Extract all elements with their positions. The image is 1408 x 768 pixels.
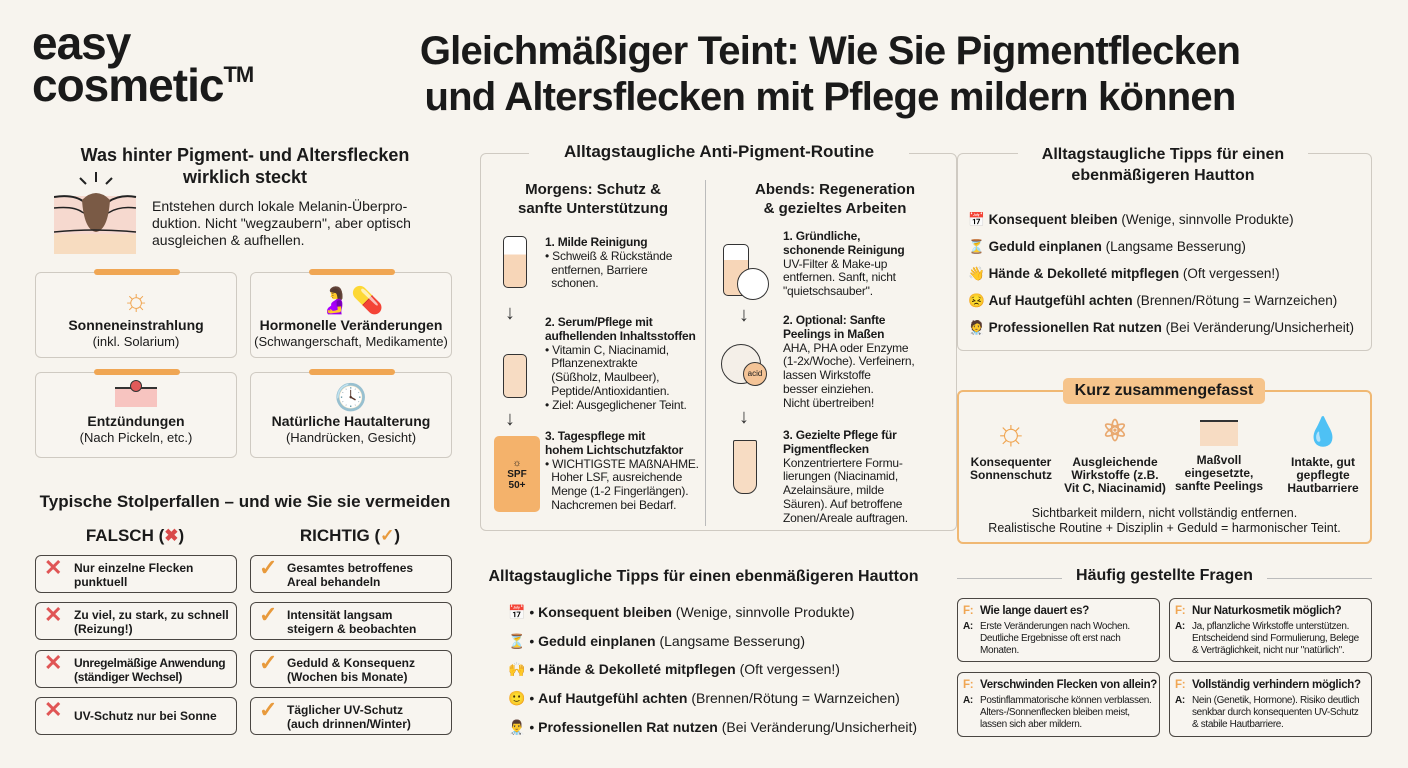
FAQ boxes xyxy=(957,598,1372,737)
summary items: gepflegte xyxy=(1296,468,1350,482)
panel: routine: (1-2x/Woche). Verfeinern, xyxy=(783,354,915,368)
panel: routine: acid xyxy=(748,369,762,378)
FAQ boxes: A: xyxy=(963,695,973,706)
summary items: ⚛ xyxy=(1102,415,1128,448)
card: Sonne: Sonneneinstrahlung xyxy=(68,317,204,333)
text: evening steps: "quietschsauber". xyxy=(783,284,873,298)
list: richtig: (Wochen bis Monate) xyxy=(287,670,407,684)
summary items: Ausgleichende xyxy=(1072,455,1158,469)
list: tips middle xyxy=(508,604,917,735)
list: tips right xyxy=(968,212,1354,335)
card: Hormone xyxy=(250,272,452,358)
icon: serum dropper xyxy=(503,354,527,398)
panel: routine: Azelainsäure, milde xyxy=(783,483,884,497)
text: morning steps: 1. Milde Reinigung xyxy=(545,235,647,249)
heading: morgens: sanfte Unterstützung xyxy=(518,200,668,217)
panel: routine: 2. Optional: Sanfte xyxy=(783,313,885,327)
panel: routine: hohem Lichtschutzfaktor xyxy=(545,443,683,457)
card: Entzündungen xyxy=(35,372,237,458)
list: falsch: (Reizung!) xyxy=(74,622,133,636)
text: intro: Entstehen durch lokale Melanin-Überpro- xyxy=(152,198,407,214)
summary items: Hautbarriere xyxy=(1287,481,1359,495)
panel: routine: besser einziehen. xyxy=(783,382,874,396)
heading: summary xyxy=(1063,378,1265,404)
FAQ boxes: F: xyxy=(963,605,973,617)
list: tips middle: 👨‍⚕️ • Professionellen Rat nutzen (Bei Veränderung/Unsicherheit) xyxy=(508,719,917,735)
card: Hautalterung: 🕓 xyxy=(335,382,367,412)
list: richtig: Areal behandeln xyxy=(287,575,380,589)
text: evening steps: UV-Filter & Make-up xyxy=(783,257,887,271)
FAQ boxes: F: xyxy=(963,679,973,691)
panel: routine: Zonen/Areale auftragen. xyxy=(783,511,908,525)
list: richtig: (auch drinnen/Winter) xyxy=(287,717,411,731)
text: morning steps: entfernen, Barriere xyxy=(551,263,648,277)
list: falsch: ✕ xyxy=(44,650,62,675)
summary items: Maßvoll xyxy=(1197,453,1241,467)
icon: spf tube: ☼ xyxy=(512,458,522,469)
list: tips right: 📅 Konsequent bleiben (Wenige, sinnvolle Produkte) xyxy=(968,212,1294,227)
summary text xyxy=(988,506,1341,535)
card: Hormone: Hormonelle Veränderungen xyxy=(260,317,442,333)
panel: routine: Peelings in Maßen xyxy=(783,327,884,341)
summary items: Vit C, Niacinamid) xyxy=(1064,481,1166,495)
icon: spf tube xyxy=(494,436,540,512)
panel: routine: 2. Serum/Pflege mit xyxy=(545,315,653,329)
icon: peeling pad xyxy=(721,344,761,384)
text: evening steps: schonende Reinigung xyxy=(783,243,905,257)
summary items: Wirkstoffe (z.B. xyxy=(1071,468,1159,482)
icon: spot tube xyxy=(733,440,757,494)
heading: abends xyxy=(755,181,915,217)
panel: routine: Pflanzenextrakte xyxy=(551,356,637,370)
list: falsch: ✕ xyxy=(44,602,62,627)
list: falsch: punktuell xyxy=(74,575,127,589)
FAQ boxes: Nein (Genetik, Hormone). Risiko deutlich senkbar durch konsequenten UV-Schutz & stabile Hautbarriere. xyxy=(1192,695,1359,730)
card: Sonne: (inkl. Solarium) xyxy=(93,334,179,349)
list: tips middle: 📅 • Konsequent bleiben (Wenige, sinnvolle Produkte) xyxy=(508,604,855,620)
card: Sonne xyxy=(35,272,237,358)
list: falsch: UV-Schutz nur bei Sonne xyxy=(74,709,217,723)
list: tips middle: ⏳ • Geduld einplanen (Langsame Besserung) xyxy=(508,633,805,649)
list: richtig: Täglicher UV-Schutz xyxy=(287,703,403,717)
FAQ boxes: A: xyxy=(1175,695,1185,706)
panel: routine: (Süßholz, Maulbeer), xyxy=(551,370,659,384)
logo xyxy=(32,17,253,111)
panel: routine xyxy=(480,153,957,531)
summary items: Konsequenter xyxy=(971,455,1051,469)
text: morning steps: • Schweiß & Rückstände xyxy=(545,249,672,263)
title: Gleichmäßiger Teint: Wie Sie Pigmentflecken xyxy=(420,29,1240,73)
heading: morgens xyxy=(518,181,668,217)
panel: routine: Pigmentflecken xyxy=(783,442,869,456)
panel: routine: lassen Wirkstoffe xyxy=(783,368,871,382)
logo: cosmeticTM xyxy=(32,59,253,111)
card: Entzündungen: Entzündungen xyxy=(87,413,185,429)
list: tips middle: 🙌 • Hände & Dekolleté mitpflegen (Oft vergessen!) xyxy=(508,661,840,677)
logo: easy xyxy=(32,17,130,69)
heading: routine: Alltagstaugliche Anti-Pigment-Routine xyxy=(564,142,874,161)
text: evening steps xyxy=(783,229,905,298)
summary items: Sonnenschutz xyxy=(970,468,1052,482)
summary items: eingesetzte, xyxy=(1185,466,1253,480)
list: richtig xyxy=(250,555,452,735)
FAQ boxes: Vollständig verhindern möglich? xyxy=(1192,679,1361,691)
icon: skin layers xyxy=(54,172,136,254)
list: tips right: 👋 Hände & Dekolleté mitpflegen (Oft vergessen!) xyxy=(968,266,1280,281)
FAQ boxes: Verschwinden Flecken von allein? xyxy=(980,679,1157,691)
FAQ boxes: A: xyxy=(1175,621,1185,632)
text: morning steps: schonen. xyxy=(551,276,598,290)
label: falsch: FALSCH (✖) xyxy=(86,526,184,545)
list: falsch xyxy=(35,555,237,735)
panel: routine: 3. Tagespflege mit xyxy=(545,429,645,443)
heading: Stolperfallen: Typische Stolperfallen – und wie Sie sie vermeiden xyxy=(40,492,450,511)
panel: routine: ↓ xyxy=(505,408,515,430)
list: tips right: 🧑‍⚕️ Professionellen Rat nutzen (Bei Veränderung/Unsicherheit) xyxy=(968,320,1354,335)
panel: tips right xyxy=(957,153,1372,351)
label: richtig: RICHTIG (✓) xyxy=(300,526,400,545)
text: evening steps: 1. Gründliche, xyxy=(783,229,860,243)
title: und Altersflecken mit Pflege mildern können xyxy=(425,75,1235,119)
text: morning steps xyxy=(545,235,672,290)
panel: routine: AHA, PHA oder Enzyme xyxy=(783,341,908,355)
card: Hautalterung: Natürliche Hautalterung xyxy=(272,413,430,429)
panel: routine: Peptide/Antioxidantien. xyxy=(551,384,669,398)
panel: routine: lierungen (Niacinamid, xyxy=(783,469,898,483)
list: richtig: steigern & beobachten xyxy=(287,622,416,636)
list: falsch: ✕ xyxy=(44,555,62,580)
panel: summary xyxy=(957,390,1372,544)
summary text: Realistische Routine + Disziplin + Geduld = harmonischer Teint. xyxy=(988,521,1341,535)
summary items: sanfte Peelings xyxy=(1175,479,1263,493)
icon: cleanser evening xyxy=(723,244,749,296)
heading: tips middle: Alltagstaugliche Tipps für einen ebenmäßigeren Hautton xyxy=(488,568,918,585)
heading: morgens: Morgens: Schutz & xyxy=(525,181,661,198)
card: Hautalterung xyxy=(250,372,452,458)
list: tips right: ⏳ Geduld einplanen (Langsame Besserung) xyxy=(968,239,1246,254)
heading: causes: wirklich steckt xyxy=(183,167,307,187)
list: richtig: ✓ xyxy=(259,697,277,722)
FAQ boxes: Postinflammatorische können verblassen. Alters-/Sonnenflecken bleiben meist, lassen sich aber mildern. xyxy=(980,695,1151,730)
heading: abends: & gezieltes Arbeiten xyxy=(764,200,906,217)
summary items: Intakte, gut xyxy=(1291,455,1355,469)
card: Hautalterung: (Handrücken, Gesicht) xyxy=(286,430,416,445)
heading: tips right: Alltagstaugliche Tipps für einen xyxy=(1042,146,1284,163)
panel: routine: Konzentriertere Formu- xyxy=(783,456,903,470)
panel: routine: • Vitamin C, Niacinamid, xyxy=(545,343,669,357)
list: richtig: ✓ xyxy=(259,602,277,627)
panel: routine: Menge (1-2 Fingerlängen). xyxy=(551,484,688,498)
icon: pump bottle xyxy=(503,236,527,288)
FAQ boxes: Nur Naturkosmetik möglich? xyxy=(1192,605,1341,617)
list: tips middle: 🙂 • Auf Hautgefühl achten (Brennen/Rötung = Warnzeichen) xyxy=(508,690,900,706)
list: richtig: Intensität langsam xyxy=(287,608,392,622)
list: richtig: ✓ xyxy=(259,555,277,580)
panel: routine: Hoher LSF, ausreichende xyxy=(551,470,682,484)
heading: FAQ: Häufig gestellte Fragen xyxy=(1076,567,1253,584)
text: intro: ausgleichen & aufhellen. xyxy=(152,232,305,248)
panel: routine: • Ziel: Ausgeglichener Teint. xyxy=(545,398,687,412)
FAQ boxes: F: xyxy=(1175,605,1185,617)
panel: routine: ↓ xyxy=(505,302,515,324)
summary text: Sichtbarkeit mildern, nicht vollständig entfernen. xyxy=(1032,506,1297,520)
panel: routine: aufhellenden Inhaltsstoffen xyxy=(545,329,696,343)
list: tips right: 😣 Auf Hautgefühl achten (Brennen/Rötung = Warnzeichen) xyxy=(968,293,1337,308)
heading: causes xyxy=(80,145,409,187)
panel: routine: ↓ xyxy=(739,406,749,428)
list: falsch: Nur einzelne Flecken xyxy=(74,561,193,575)
FAQ boxes: Ja, pflanzliche Wirkstoffe unterstützen. Entscheidend sind Formulierung, Belege & Verträglichkeit, nicht nur "natürlich". xyxy=(1192,621,1359,656)
title xyxy=(420,29,1240,119)
FAQ boxes: A: xyxy=(963,621,973,632)
list: falsch: Zu viel, zu stark, zu schnell xyxy=(74,608,229,622)
text: evening steps: entfernen. Sanft, nicht xyxy=(783,270,896,284)
FAQ boxes: F: xyxy=(1175,679,1185,691)
card: Sonne: ☼ xyxy=(122,284,150,317)
heading: causes: Was hinter Pigment- und Altersflecken xyxy=(81,145,409,165)
summary items: ☼ xyxy=(994,411,1028,452)
panel: routine: ↓ xyxy=(739,304,749,326)
heading: tips right xyxy=(1018,144,1308,186)
FAQ boxes: Erste Veränderungen nach Wochen. Deutliche Ergebnisse oft erst nach Monaten. xyxy=(980,621,1130,656)
list: richtig: Geduld & Konsequenz xyxy=(287,656,415,670)
list: richtig: Gesamtes betroffenes xyxy=(287,561,413,575)
panel: routine: • WICHTIGSTE MAßNAHME. xyxy=(545,457,699,471)
icon: spf tube: SPF xyxy=(507,469,527,480)
summary items: 💧 xyxy=(1306,416,1340,447)
FAQ boxes: Wie lange dauert es? xyxy=(980,605,1089,617)
list: falsch: (ständiger Wechsel) xyxy=(74,670,182,684)
icon: spf tube: 50+ xyxy=(509,480,525,491)
list: falsch: Unregelmäßige Anwendung xyxy=(74,656,225,670)
heading: summary: Kurz zusammengefasst xyxy=(1075,382,1253,399)
card: Hormone: 🤰💊 xyxy=(319,285,383,315)
panel: routine: Nachcremen bei Bedarf. xyxy=(551,498,676,512)
text: intro: duktion. Nicht "wegzaubern", aber optisch xyxy=(152,215,411,231)
heading: tips right: ebenmäßigeren Hautton xyxy=(1071,167,1255,184)
list: richtig: ✓ xyxy=(259,650,277,675)
panel: routine: 3. Gezielte Pflege für xyxy=(783,428,897,442)
heading: abends: Abends: Regeneration xyxy=(755,181,915,198)
panel: routine: Säuren). Auf betroffene xyxy=(783,497,902,511)
panel: routine: Nicht übertreiben! xyxy=(783,396,874,410)
card: Entzündungen: (Nach Pickeln, etc.) xyxy=(80,430,192,445)
card: Hormone: (Schwangerschaft, Medikamente) xyxy=(254,334,448,349)
summary items xyxy=(970,411,1359,495)
list: falsch: ✕ xyxy=(44,697,62,722)
text: intro xyxy=(152,198,411,248)
